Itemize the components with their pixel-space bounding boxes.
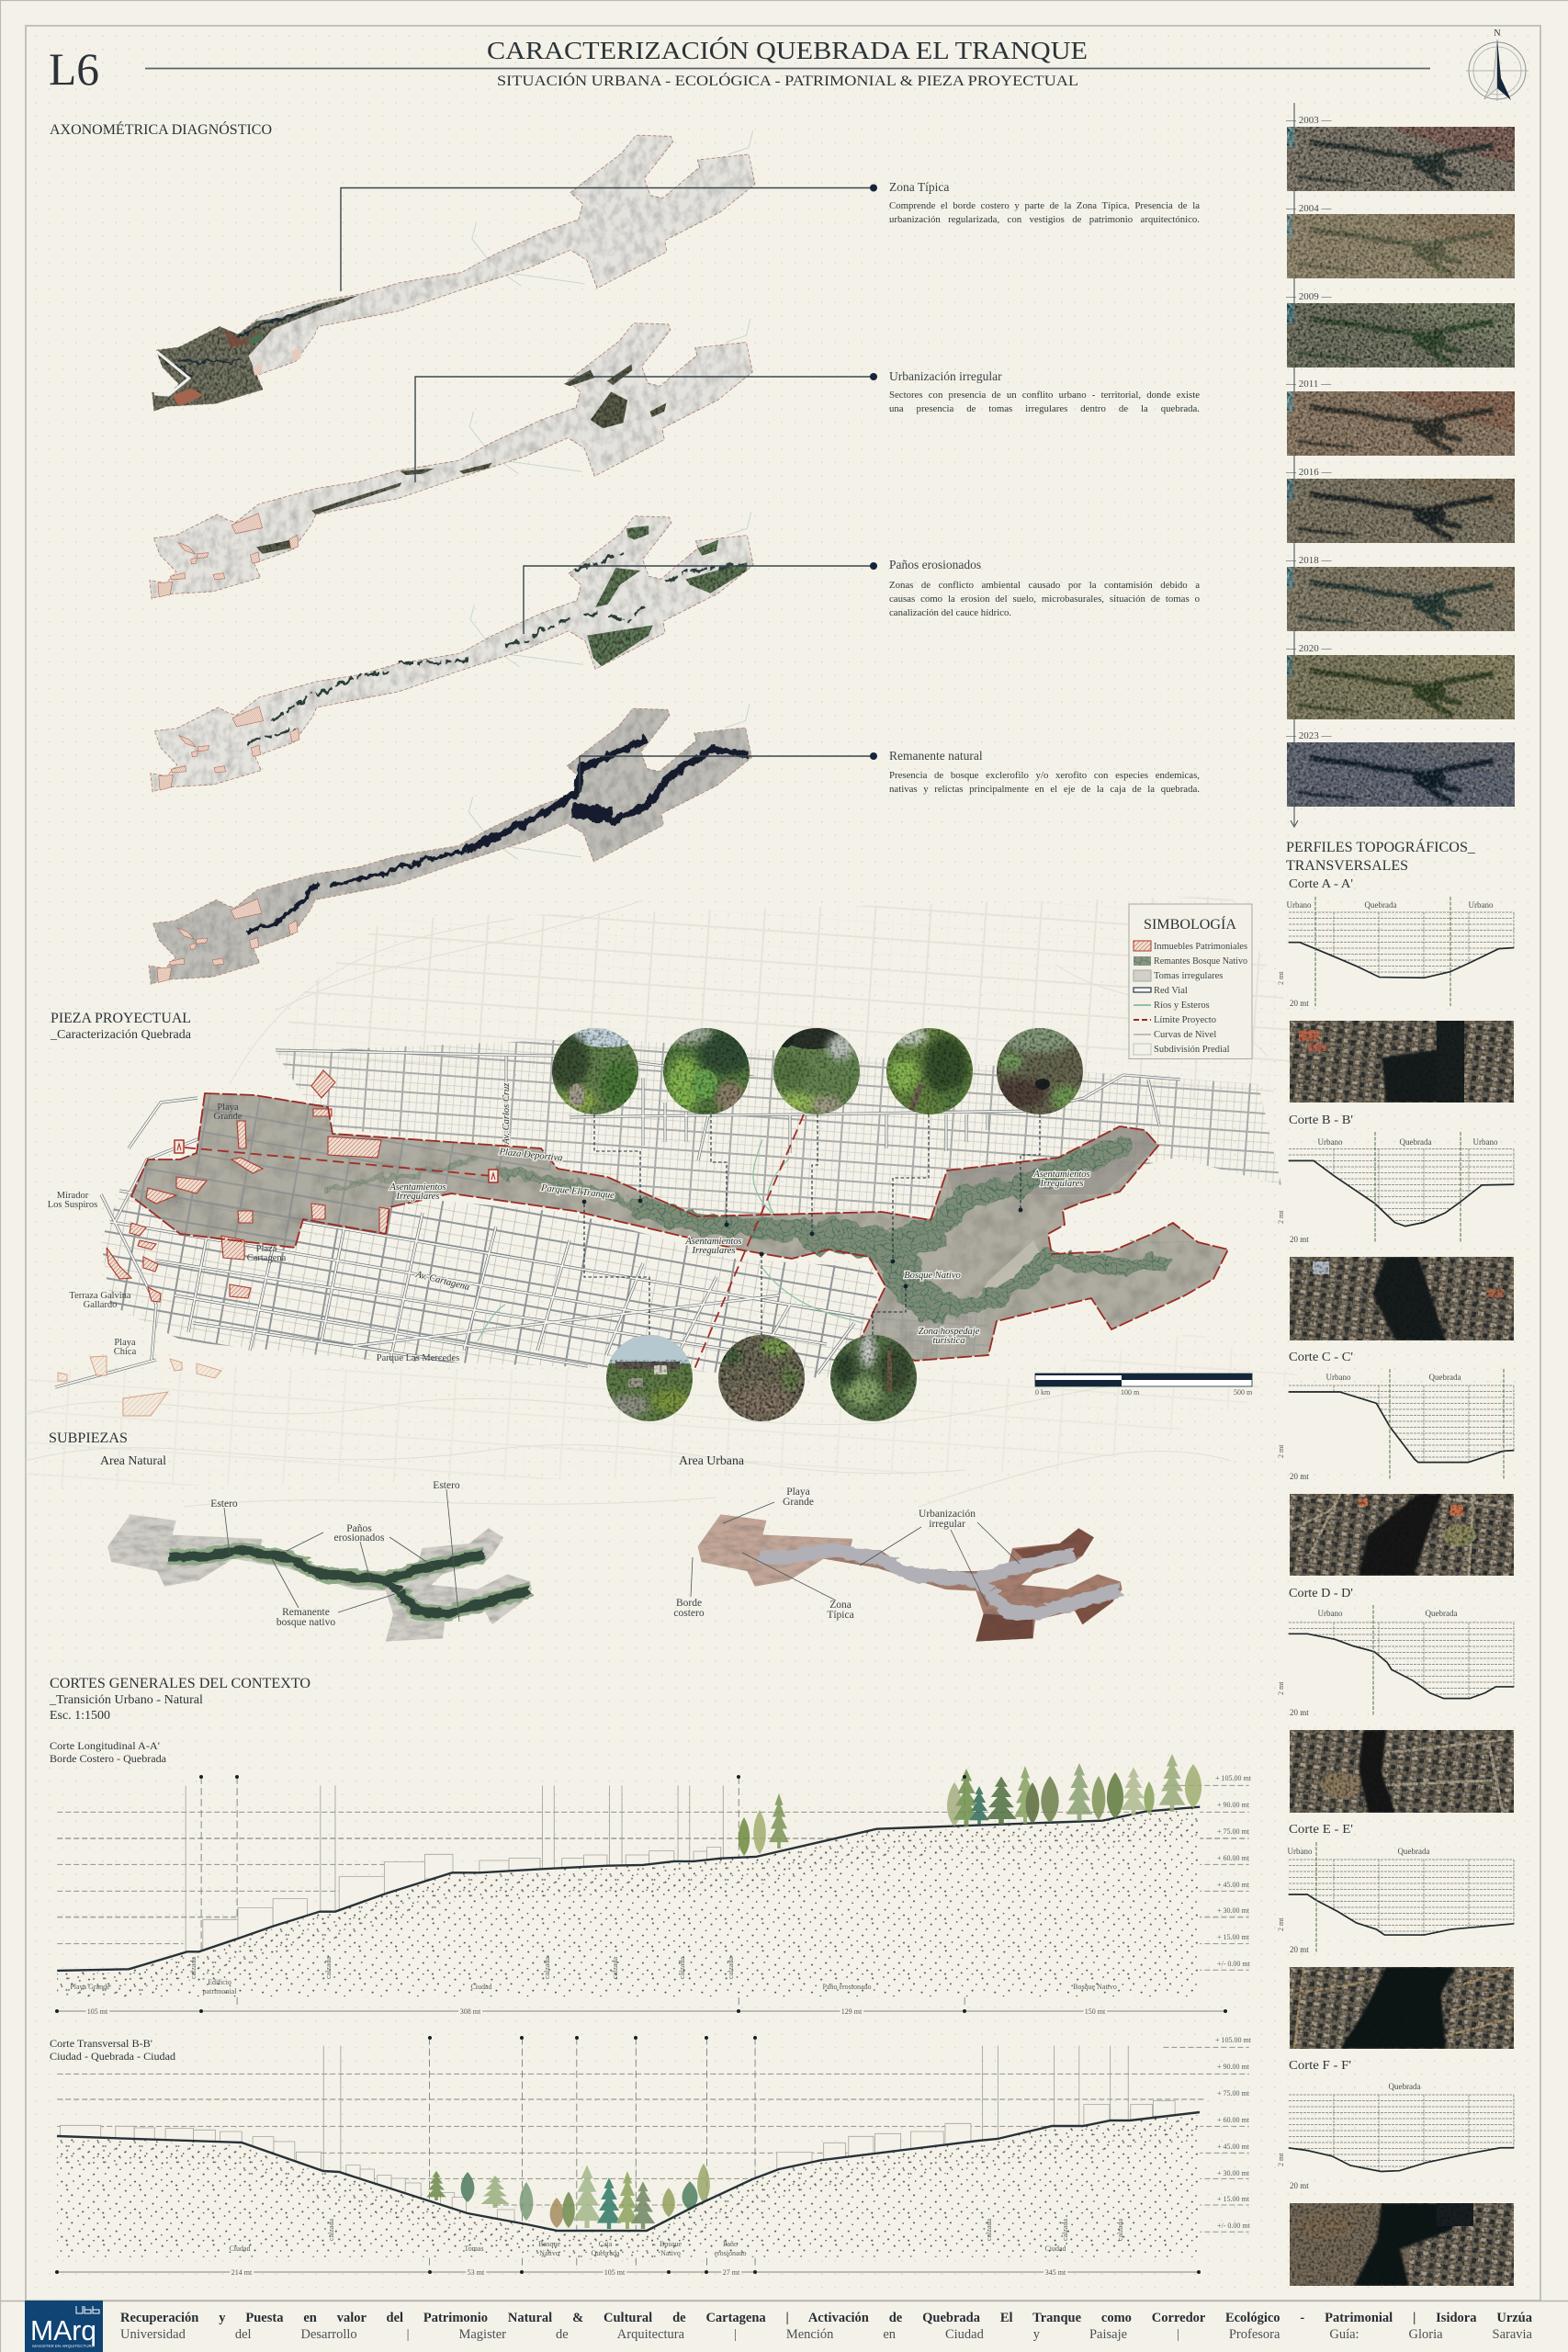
map: place labels: Av. Cartagena	[414, 1270, 470, 1293]
subpieza: area natural labels: Remanente	[282, 1607, 330, 1618]
satellite photo 2009	[1287, 303, 1515, 368]
section B zone names: Bosque	[660, 2240, 682, 2248]
legend: simbología: Subdivisión Predial	[1154, 1045, 1230, 1055]
profile F	[1277, 2059, 1518, 2190]
section A level labels: + 90.00 mt	[1217, 1801, 1250, 1809]
label: area natural: Area Natural	[100, 1453, 166, 1467]
section B zone names: Ciudad	[1044, 2245, 1066, 2253]
section A calzada labels	[189, 1957, 735, 1979]
heading: pieza proyectual	[50, 1011, 191, 1041]
section B calzada labels	[327, 2219, 1124, 2241]
satellite photo 2011	[1287, 391, 1515, 456]
section A title	[50, 1739, 167, 1765]
section A calzada labels: calzada	[324, 1957, 333, 1979]
profile E: Corte E - E'	[1289, 1823, 1353, 1837]
section B zone names: Nativo	[660, 2249, 681, 2257]
satellite photo 2016	[1287, 479, 1515, 543]
map: place labels: Cartagena	[247, 1253, 287, 1263]
map: place labels: Av. Carlos Cruz	[502, 1083, 512, 1145]
text: zona típica description: urbanización regularizada, con vestigios de patrimonio arquitectónico.	[889, 214, 1200, 225]
timeline: year labels: — 2020 —	[1285, 643, 1332, 654]
section A calzada labels: calzada	[727, 1957, 735, 1979]
section A level labels: + 15.00 mt	[1217, 1933, 1250, 1941]
subpieza: area urbana labels: Grande	[783, 1497, 814, 1508]
section B dimension line: 345 mt	[1045, 2268, 1066, 2277]
text: remanente natural description: Presencia de bosque exclerofilo y/o xerofito con especies endemicas,	[889, 770, 1200, 781]
callout: urbanización irregular	[415, 373, 877, 482]
callout: zona típica	[341, 184, 877, 291]
icon: north compass	[1466, 28, 1529, 101]
timeline: year labels: — 2009 —	[1285, 291, 1332, 302]
heading: perfiles topográficos	[1286, 838, 1476, 874]
heading: cortes generales: Esc. 1:1500	[50, 1708, 110, 1722]
section A dimension line: 129 mt	[841, 2007, 863, 2016]
axonometric 1: zona típica	[152, 130, 755, 411]
subpieza: area natural labels	[210, 1480, 460, 1628]
subpieza: area urbana callouts	[691, 1502, 1020, 1606]
section A dimension line: 105 mt	[87, 2007, 108, 2016]
axonometric 4: remanente natural	[149, 704, 751, 984]
legend: simbología: Red Vial	[1154, 986, 1188, 996]
map: place labels: Mirador	[57, 1191, 89, 1201]
profile A aerial photo	[1290, 1021, 1514, 1102]
timeline: year labels: — 2023 —	[1285, 730, 1332, 741]
legend: simbología: Curvas de Nivel	[1154, 1030, 1216, 1040]
photo circle 6	[605, 1334, 694, 1422]
section A zone names: Ciudad	[470, 1983, 492, 1991]
section B trees	[426, 2164, 710, 2229]
footer line 2: Universidad del Desarrollo | Magister de Arquitectura | Mención en Ciudad y Paisaje | Profesora Guía: Gloria Saravia	[120, 2327, 1532, 2342]
photo circle 7	[717, 1334, 806, 1422]
title rule	[145, 68, 1430, 70]
timeline: year labels	[1285, 115, 1332, 741]
legend: simbología: SIMBOLOGÍA	[1144, 915, 1236, 933]
logo: MArq: MAGISTER EN ARQUITECTURA	[32, 2344, 95, 2348]
text: urbanización irregular description	[889, 390, 1200, 414]
satellite photo 2023	[1287, 742, 1515, 807]
section B calzada labels: calzada	[1061, 2219, 1069, 2241]
section B title: Corte Transversal B-B'	[50, 2037, 152, 2050]
section A level labels: + 60.00 mt	[1217, 1854, 1250, 1862]
profile D: 20 mt	[1290, 1708, 1309, 1717]
photo circle 5	[997, 1028, 1083, 1114]
logo: MArq: MArq	[30, 2314, 96, 2346]
profile C: Corte C - C'	[1289, 1351, 1353, 1364]
profile D aerial photo	[1290, 1730, 1514, 1813]
map: place labels: Irregulares	[691, 1246, 736, 1256]
heading: cortes generales: _Transición Urbano - Natural	[49, 1692, 203, 1706]
subpieza: area natural labels: Paños	[346, 1523, 372, 1534]
section A level labels: + 45.00 mt	[1217, 1881, 1250, 1889]
satellite photo 2020	[1287, 655, 1515, 719]
map: place labels: Parque El Tranque	[540, 1183, 615, 1201]
profile B aerial photo	[1290, 1257, 1514, 1340]
profile C: 20 mt	[1290, 1472, 1309, 1481]
satellite photo 2018	[1287, 567, 1515, 631]
profile A: Quebrada	[1365, 900, 1396, 910]
section A level labels	[1215, 1774, 1252, 1968]
subpieza: area natural map	[107, 1514, 532, 1642]
scale bar: 100 m	[1121, 1388, 1140, 1396]
text: urbanización irregular title: Urbanización irregular	[889, 369, 1002, 383]
map: place labels: Zona hospedaje	[919, 1327, 980, 1337]
section A dimension line	[55, 1775, 1227, 2016]
section B zone names: Paño	[723, 2240, 738, 2248]
subpieza: area natural labels: Estero	[433, 1480, 460, 1491]
section A zone names	[70, 1978, 1117, 1996]
subpieza: area urbana labels: Urbanización	[919, 1509, 976, 1520]
heading: cortes generales	[49, 1676, 310, 1722]
section B level labels	[1215, 2036, 1252, 2230]
heading: perfiles topográficos: PERFILES TOPOGRÁFICOS_	[1286, 838, 1476, 855]
subtitle: SITUACIÓN URBANA - ECOLÓGICA - PATRIMONIAL & PIEZA PROYECTUAL	[497, 72, 1078, 89]
profile F: Quebrada	[1389, 2082, 1420, 2091]
section A title: Corte Longitudinal A-A'	[50, 1739, 160, 1752]
section A zone names: Paño erosionado	[822, 1983, 872, 1991]
text: remanente natural title: Remanente natural	[889, 749, 983, 763]
map: place labels: Gallardo	[84, 1300, 117, 1310]
profile F: 2 mt	[1277, 2153, 1285, 2166]
profile B: Corte B - B'	[1289, 1114, 1353, 1127]
profile B: Urbano	[1317, 1137, 1343, 1147]
timeline: year labels: — 2016 —	[1285, 467, 1332, 478]
subpieza: area urbana labels: costero	[673, 1608, 705, 1619]
icon: north compass: N	[1494, 28, 1501, 39]
text: paños erosionados description: canalización del cauce hídrico.	[889, 607, 1011, 618]
section A zone names: Edificio	[208, 1978, 231, 1986]
section A zone names: patrimonial	[203, 1987, 237, 1996]
heading: subpiezas: SUBPIEZAS	[49, 1430, 128, 1446]
section A title: Borde Costero - Quebrada	[50, 1752, 167, 1765]
section A trees	[739, 1754, 1201, 1856]
section B title: Ciudad - Quebrada - Ciudad	[50, 2050, 175, 2063]
map: place labels: Asentamientos	[1032, 1170, 1090, 1180]
map: place labels: Los Suspiros	[48, 1200, 97, 1210]
text: zona típica description	[889, 200, 1200, 225]
text: paños erosionados description: Zonas de conflicto ambiental causado por la contamisión debido a	[889, 580, 1200, 591]
timeline: year labels: — 2011 —	[1285, 379, 1332, 390]
heading: pieza proyectual: PIEZA PROYECTUAL	[51, 1011, 191, 1026]
profile B	[1277, 1114, 1518, 1244]
legend: simbología: Inmuebles Patrimoniales	[1154, 942, 1247, 952]
profile D: Corte D - D'	[1289, 1587, 1353, 1600]
profile A: Corte A - A'	[1289, 877, 1353, 891]
section B zone names: Quebrada	[591, 2249, 620, 2257]
profile B: 20 mt	[1290, 1235, 1309, 1244]
map: native forest remnants	[328, 1147, 1162, 1306]
map: faint context streets and contours	[26, 896, 1304, 1507]
subpieza: area urbana labels	[673, 1487, 976, 1621]
map: section cut lines	[175, 1114, 804, 1369]
section B zone names	[229, 2240, 1066, 2257]
profile A: 20 mt	[1290, 999, 1309, 1008]
section B dimension line: 27 mt	[723, 2268, 740, 2277]
map: place labels: turística	[932, 1336, 965, 1346]
text: paños erosionados title: Paños erosionados	[889, 558, 981, 571]
axonometric 3: paños erosionados	[151, 512, 753, 792]
section A drawing	[57, 1777, 1249, 2007]
heading: axonométrica: AXONOMÉTRICA DIAGNÓSTICO	[50, 122, 272, 138]
heading: cortes generales: CORTES GENERALES DEL CONTEXTO	[50, 1676, 310, 1691]
section A level labels: + 105.00 mt	[1215, 1774, 1252, 1782]
satellite photo 2004	[1287, 214, 1515, 278]
subpieza: area urbana labels: Zona	[829, 1600, 852, 1611]
text: paños erosionados description: causas como la erosion del suelo, microbasurales, situación de tomas o	[889, 594, 1200, 605]
map: thin streams	[478, 1139, 1194, 1341]
subpieza: area natural labels: Estero	[210, 1498, 238, 1510]
label: area urbana: Area Urbana	[679, 1453, 744, 1467]
heading: pieza proyectual: _Caracterización Quebrada	[50, 1027, 191, 1041]
scale bar: 500 m	[1234, 1388, 1253, 1396]
profile C	[1277, 1351, 1518, 1481]
section A level labels: +/- 0.00 mt	[1217, 1960, 1251, 1968]
section B level labels: + 60.00 mt	[1217, 2116, 1250, 2124]
profile C: Quebrada	[1429, 1373, 1461, 1382]
map: dashed photo leaders	[584, 1114, 1040, 1335]
subpieza: area urbana labels: Playa	[786, 1487, 810, 1498]
photo circle 8	[829, 1334, 918, 1422]
profile E: 20 mt	[1290, 1945, 1309, 1954]
callout: remanente natural	[580, 752, 877, 792]
map: place labels: Irregulares	[395, 1192, 440, 1202]
section A calzada labels: calzada	[611, 1957, 619, 1979]
section B dimension line: 214 mt	[231, 2268, 253, 2277]
timeline axis	[1291, 103, 1298, 827]
profile C: 2 mt	[1277, 1444, 1285, 1458]
map: project boundary	[131, 1093, 1228, 1361]
subpieza: area urbana labels: Típica	[827, 1610, 854, 1621]
profile E	[1277, 1823, 1518, 1954]
section A zone names: Playa Grande	[70, 1983, 110, 1991]
timeline: year labels: — 2004 —	[1285, 203, 1332, 214]
section A calzada labels: calzada	[543, 1957, 551, 1979]
profile B: Urbano	[1473, 1137, 1498, 1147]
scale bar: 0 km	[1035, 1388, 1051, 1396]
map: place labels: Playa	[114, 1338, 136, 1348]
profile A: Urbano	[1468, 900, 1494, 910]
map: place labels: Plaza	[256, 1244, 277, 1254]
map: south street mesh	[55, 1098, 882, 1387]
scale bar	[1035, 1374, 1253, 1396]
section A zone names: Bosque Nativo	[1073, 1983, 1117, 1991]
profile E aerial photo	[1290, 1967, 1514, 2049]
subpieza: area natural callouts	[224, 1489, 459, 1622]
map: place labels: Asentamientos	[389, 1182, 446, 1193]
map: place labels: Terraza Galvina	[69, 1291, 131, 1301]
footer rule	[0, 2301, 1568, 2302]
map: place labels: Parque Las Mercedes	[377, 1353, 459, 1363]
map: place labels: Grande	[214, 1112, 243, 1122]
profile D: 2 mt	[1277, 1681, 1285, 1695]
axonometric 2: urbanización irregular	[150, 319, 752, 599]
text: remanente natural description	[889, 770, 1200, 795]
map: place labels: Plaza Deportiva	[498, 1147, 563, 1164]
section B level labels: + 15.00 mt	[1217, 2195, 1250, 2203]
profile C aerial photo	[1290, 1494, 1514, 1576]
section A calzada labels: calzada	[678, 1957, 686, 1979]
map: leader end points	[582, 1199, 1022, 1288]
subpieza: area urbana labels: irregular	[929, 1519, 965, 1530]
section B level labels: + 90.00 mt	[1217, 2063, 1250, 2071]
profile E: Quebrada	[1398, 1847, 1429, 1856]
section B calzada labels: calzada	[1116, 2219, 1124, 2241]
legend: simbología: Remantes Bosque Nativo	[1154, 956, 1247, 967]
heading: perfiles topográficos: TRANSVERSALES	[1286, 858, 1408, 874]
satellite photo 2003	[1287, 127, 1515, 191]
profile D: Quebrada	[1426, 1609, 1457, 1618]
map letter L6: L6	[49, 43, 99, 95]
subpieza: area urbana map	[698, 1514, 1122, 1642]
text: remanente natural description: nativas y relictas principalmente en el eje de la caja de la quebrada.	[889, 784, 1200, 795]
footer line 1: Recuperación y Puesta en valor del Patrimonio Natural & Cultural de Cartagena | Activación de Quebrada El Tranque como Corredor Ecológico - Patrimonial | Isidora Urzúa	[120, 2311, 1532, 2325]
section A dimension line: 150 mt	[1085, 2007, 1106, 2016]
subpieza: area natural labels: bosque nativo	[276, 1617, 335, 1628]
timeline: year labels: — 2003 —	[1285, 115, 1332, 126]
section B level labels: + 75.00 mt	[1217, 2089, 1250, 2098]
section B zone names: Ciudad	[229, 2245, 251, 2253]
map: place labels: Playa	[217, 1102, 239, 1113]
map: faded heritage buildings	[58, 1356, 221, 1416]
logo: MArq	[25, 2301, 103, 2352]
map: place labels: Irregulares	[1039, 1179, 1084, 1189]
map: place labels: Asentamientos	[684, 1237, 742, 1247]
subpieza: area natural labels: erosionados	[334, 1532, 385, 1544]
section B dimension line	[55, 2036, 1201, 2277]
profile B: 2 mt	[1277, 1210, 1285, 1224]
section A level labels: + 30.00 mt	[1217, 1906, 1250, 1915]
text: urbanización irregular description: Sectores con presencia de un conflito urbano - territorial, donde existe	[889, 390, 1200, 401]
section A dimension line: 308 mt	[460, 2007, 481, 2016]
text: zona típica title: Zona Típica	[889, 180, 949, 194]
timeline: year labels: — 2018 —	[1285, 555, 1332, 566]
profile D: Urbano	[1317, 1609, 1343, 1618]
profile F: 20 mt	[1290, 2181, 1309, 2190]
profile E: Urbano	[1288, 1847, 1313, 1856]
photo circle 3	[771, 1027, 861, 1115]
subpieza: area urbana labels: Borde	[676, 1598, 702, 1609]
section B title	[50, 2037, 175, 2063]
callout: paños erosionados	[524, 562, 877, 634]
title: CARACTERIZACIÓN QUEBRADA EL TRANQUE	[487, 37, 1088, 64]
profile D	[1277, 1587, 1518, 1717]
section B level labels: + 30.00 mt	[1217, 2169, 1250, 2177]
profile A: Urbano	[1286, 900, 1312, 910]
map: place labels: Bosque Nativo	[904, 1271, 961, 1281]
map: heritage buildings	[107, 1070, 389, 1302]
section B zone names: erosionado	[714, 2249, 747, 2257]
legend: simbología	[1129, 904, 1252, 1058]
photo circle 4	[886, 1027, 974, 1115]
section B calzada labels: calzada	[327, 2219, 335, 2241]
map: place labels	[48, 1083, 1090, 1363]
section B dimension line: 105 mt	[604, 2268, 626, 2277]
text: zona típica description: Comprende el borde costero y parte de la Zona Típica. Presencia de la	[889, 200, 1200, 211]
photo circle 2	[663, 1028, 750, 1114]
profile E: 2 mt	[1277, 1917, 1285, 1931]
section A level labels: + 75.00 mt	[1217, 1827, 1250, 1836]
section B zone names: Caja	[599, 2240, 613, 2248]
profile A: 2 mt	[1277, 971, 1285, 985]
map: place labels: Chica	[114, 1347, 137, 1357]
profile C: Urbano	[1326, 1373, 1351, 1382]
section B level labels: + 105.00 mt	[1215, 2036, 1252, 2044]
section B zone names: Bosque	[538, 2240, 560, 2248]
text: urbanización irregular description: una presencia de tomas irregulares dentro de la quebrada.	[889, 403, 1200, 414]
section B level labels: + 45.00 mt	[1217, 2143, 1250, 2151]
map: north street mesh	[276, 1038, 1281, 1217]
section B dimension line: 53 mt	[468, 2268, 485, 2277]
legend: simbología: Tomas irregulares	[1154, 971, 1223, 981]
photo circle 1	[552, 1028, 638, 1114]
section B level labels: +/- 0.00 mt	[1217, 2222, 1251, 2230]
section A calzada labels: calzada	[189, 1957, 197, 1979]
map: project area	[131, 1093, 1228, 1361]
section B drawing	[57, 2038, 1249, 2269]
profile F aerial photo	[1290, 2203, 1514, 2286]
section B terrain line	[57, 2112, 1200, 2231]
profile B: Quebrada	[1400, 1137, 1431, 1147]
section B zone names: Tomas	[464, 2245, 484, 2253]
section B calzada labels: calzada	[985, 2219, 993, 2241]
section B zone names: Nativo	[539, 2249, 559, 2257]
legend: simbología: Límite Proyecto	[1154, 1015, 1216, 1025]
profile A	[1277, 877, 1518, 1008]
profile F: Corte F - F'	[1289, 2059, 1351, 2073]
legend: simbología: Ríos y Esteros	[1154, 1001, 1210, 1011]
text: paños erosionados description	[889, 580, 1200, 618]
